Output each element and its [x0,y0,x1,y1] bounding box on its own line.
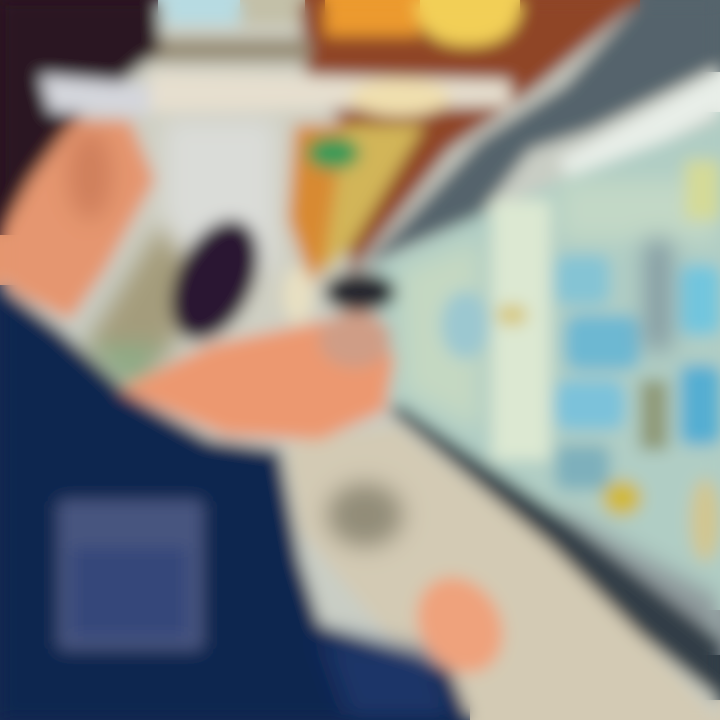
shopper: navy jacket [0,285,470,720]
shopper: face [0,120,155,320]
refrigerated shelves [375,120,720,660]
shopper: lower hand [400,562,520,688]
shelf base strip [388,405,720,700]
floor reflection [327,483,403,547]
floor [285,425,720,720]
shopper: glasses arm [40,75,150,115]
shopper: ear shadow [68,130,112,220]
ceiling: grey-blue panel at top right [360,0,720,270]
second shopper in the distance [154,206,396,354]
jacket back print [58,500,203,650]
ceiling: wooden beams and lights [150,0,640,323]
ceiling light strip [558,72,720,188]
shopper: dark hair [0,0,160,235]
shopper: forearm and raised hand [120,312,395,440]
jacket lower sleeve highlight [320,635,455,720]
background: far wall and aisle [85,0,320,390]
